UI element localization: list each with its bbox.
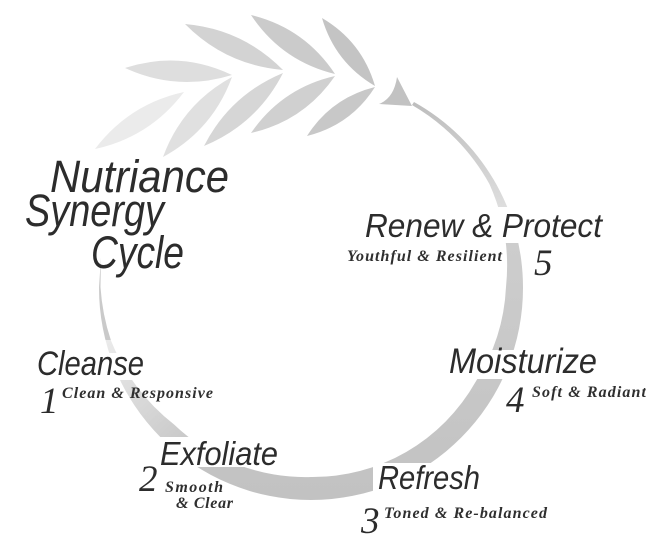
text knockout: refresh [373, 463, 463, 503]
lower-left ring fade [95, 340, 205, 460]
crescent ring band [99, 102, 523, 500]
step 3: refresh: Toned & Re-balanced [384, 505, 548, 522]
leaf 3 [251, 15, 335, 74]
step 1: cleanse: Cleanse [37, 345, 144, 383]
title: Nutriance [50, 151, 229, 202]
step 2: exfoliate: & Clear [176, 495, 234, 512]
leaf 9 [95, 92, 184, 149]
step 3: refresh [360, 459, 548, 534]
arrow head triangle [379, 77, 412, 106]
title: Synergy [25, 185, 166, 236]
step 2: exfoliate: Exfoliate [160, 435, 278, 472]
step 2: exfoliate [139, 435, 278, 512]
leaf 7 [125, 60, 232, 82]
leaf 2 lower right [307, 87, 375, 136]
step 5: renew and protect: Renew & Protect [365, 207, 604, 244]
step 5: renew and protect: Youthful & Resilient [347, 248, 503, 265]
text knockout: renew [488, 207, 533, 243]
step 2: exfoliate: 2 [139, 459, 158, 500]
step 1: cleanse: Clean & Responsive [62, 385, 213, 402]
title [25, 151, 229, 278]
step 3: refresh: Refresh [378, 459, 480, 496]
leaf 5 [185, 24, 283, 70]
leaf 6 [204, 73, 283, 146]
step 1: cleanse: 1 [40, 381, 58, 422]
step 2: exfoliate: Smooth [165, 479, 223, 496]
step 4: moisturize: Moisturize [449, 342, 597, 381]
text knockout: cleanse [100, 353, 140, 380]
leaf 8 [163, 77, 232, 157]
step 1: cleanse [37, 345, 213, 422]
title: Cycle [91, 227, 184, 278]
step 4: moisturize [449, 342, 646, 421]
leaf 4 [251, 76, 335, 133]
icon: leaf sprig [95, 15, 375, 157]
text knockout: moisturize [445, 350, 530, 379]
step 5: renew and protect [347, 207, 604, 284]
cycle ring with arrow head [95, 77, 533, 503]
step 5: renew and protect: 5 [534, 243, 552, 284]
leaf 1 upper right [322, 18, 375, 86]
step 4: moisturize: Soft & Radiant [532, 384, 646, 401]
step 4: moisturize: 4 [506, 380, 524, 421]
text knockout: exfoliate [150, 437, 280, 467]
